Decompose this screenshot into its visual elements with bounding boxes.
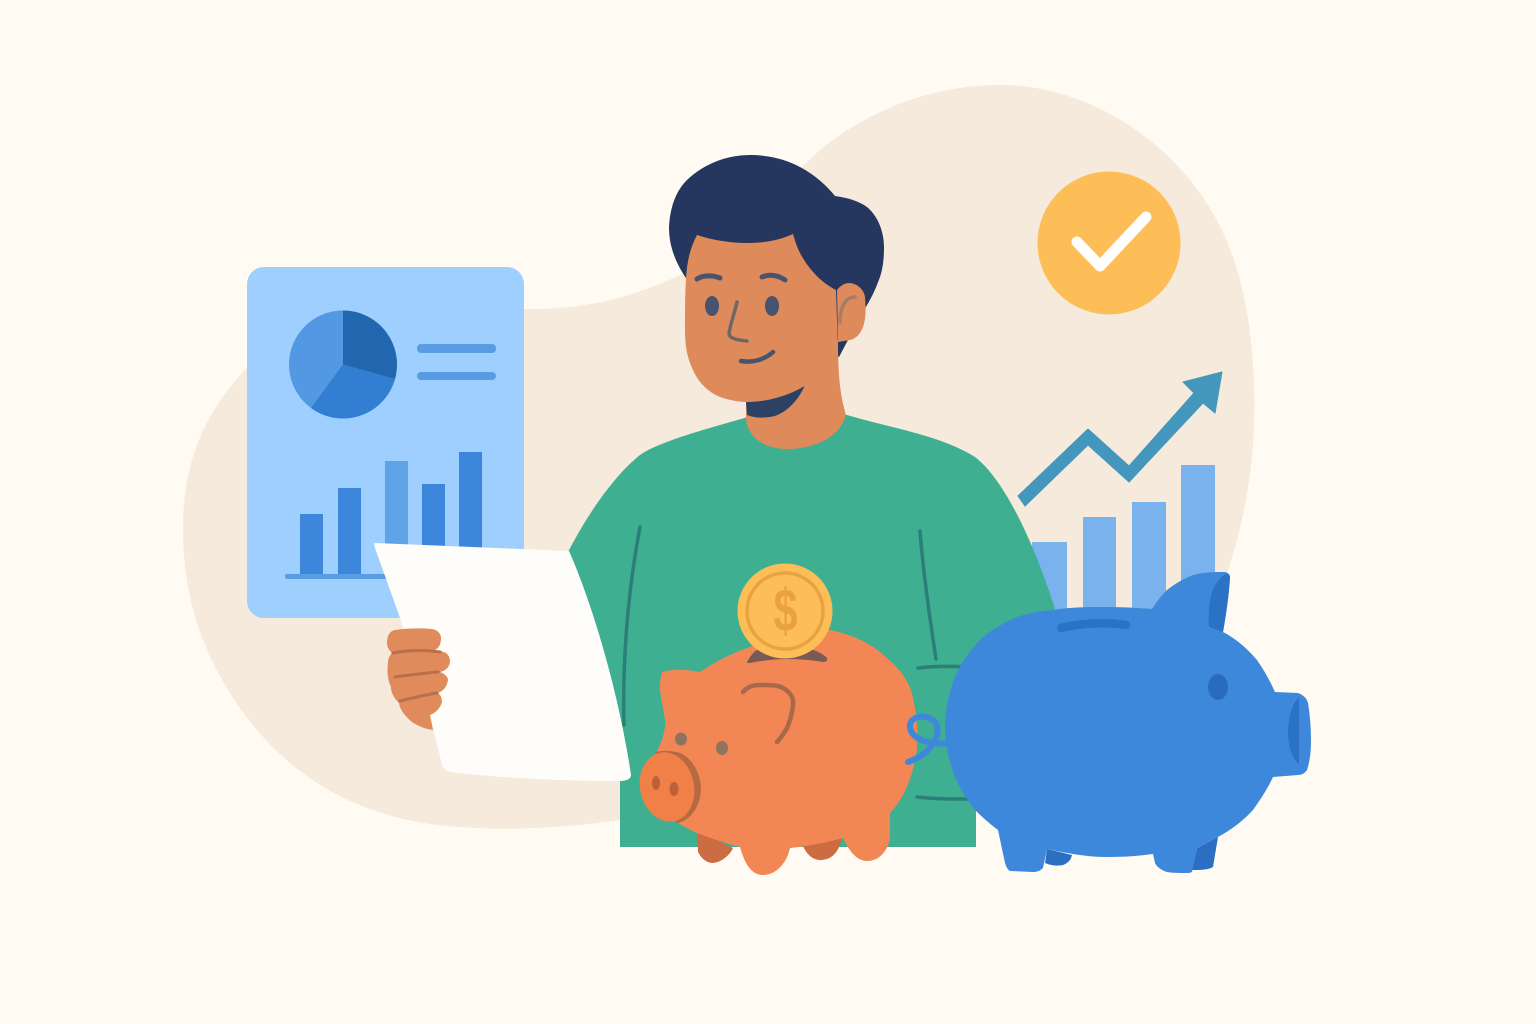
arrow: rising trend <box>1018 372 1222 506</box>
curly tail <box>908 717 948 762</box>
paper document <box>374 543 631 781</box>
collar shadow <box>746 380 807 418</box>
smile <box>741 352 773 362</box>
body <box>657 630 917 875</box>
far legs <box>1045 837 1218 870</box>
eyes <box>705 296 779 316</box>
coin <box>738 564 832 658</box>
pie chart <box>289 310 397 418</box>
finger creases <box>393 651 440 701</box>
ear <box>743 685 793 742</box>
snout <box>633 747 701 827</box>
eyebrows <box>697 275 785 280</box>
icon: yellow check badge <box>1038 172 1180 314</box>
man <box>568 155 1056 847</box>
face <box>685 234 838 402</box>
ear inner <box>1209 574 1230 632</box>
eye <box>1208 674 1228 700</box>
snout <box>1288 697 1299 764</box>
hand <box>387 628 450 730</box>
report bar chart <box>285 452 482 579</box>
panel: financial report <box>247 267 524 618</box>
blue piggy bank <box>908 572 1311 873</box>
growth bar chart <box>1032 465 1215 622</box>
coin: $ <box>773 578 798 645</box>
hair <box>669 155 884 357</box>
neck <box>746 340 846 449</box>
far legs <box>697 830 842 863</box>
orange piggy bank <box>633 564 917 875</box>
background blob <box>183 85 1254 829</box>
ear detail <box>840 297 855 322</box>
nose <box>729 302 747 341</box>
shirt folds <box>624 527 968 799</box>
slot <box>747 650 827 663</box>
ear <box>837 283 866 342</box>
shirt <box>568 415 1056 847</box>
body <box>945 572 1311 873</box>
legend lines <box>417 344 496 380</box>
coin slot <box>1061 623 1126 628</box>
eyes <box>675 732 728 755</box>
